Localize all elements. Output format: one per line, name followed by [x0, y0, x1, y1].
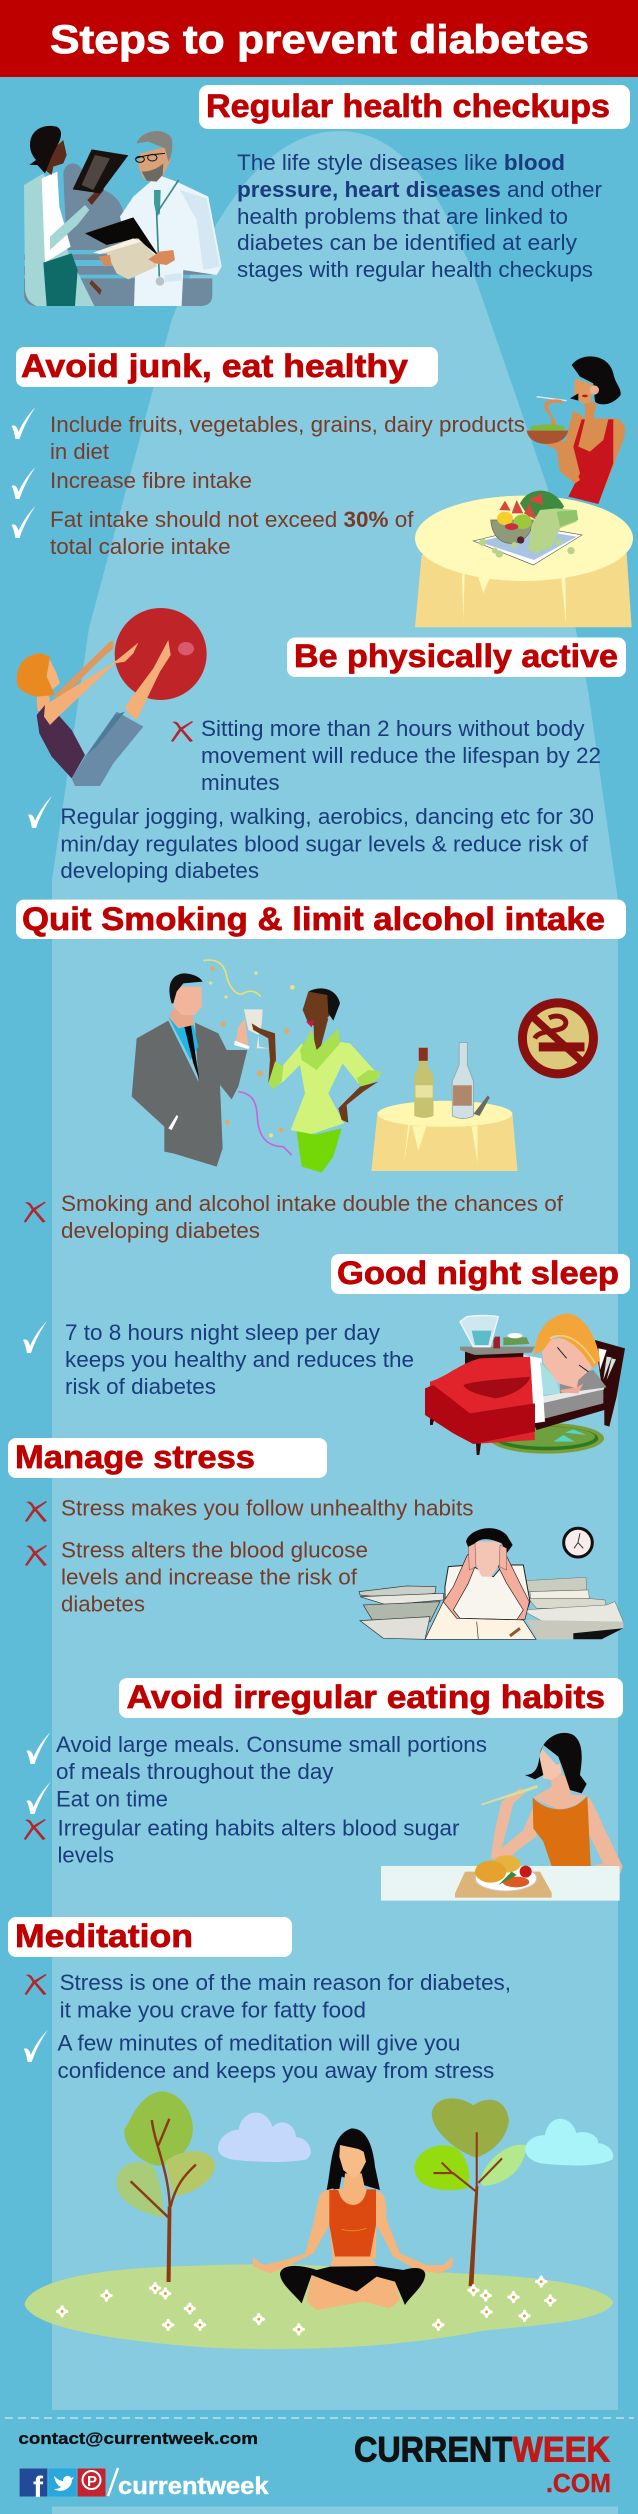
icon: facebook: f [33, 2471, 44, 2504]
illustration: woman asleep in bed [425, 1314, 625, 1455]
footer [18, 2429, 611, 2504]
tick icon [26, 1782, 50, 1814]
body text: diabetes can be identified at early [237, 230, 577, 255]
item [61, 1538, 368, 1616]
contact email: contact@currentweek.com [18, 2429, 258, 2448]
heading [8, 1438, 327, 1478]
item: it make you crave for fatty food [60, 1998, 366, 2022]
logo: WEEK [512, 2430, 610, 2470]
body text [237, 150, 602, 282]
item: Avoid large meals. Consume small portions [56, 1732, 487, 1757]
warning text: Smoking and alcohol intake double the chances of [61, 1191, 564, 1216]
warning text: movement will reduce the lifespan by 22 [201, 743, 601, 768]
flowers [56, 2276, 556, 2336]
illustration: doctors [24, 126, 222, 306]
section: avoid irregular eating [24, 1678, 623, 1901]
item: of meals throughout the day [56, 1759, 334, 1784]
item: diabetes [61, 1592, 145, 1616]
checklist [12, 407, 525, 559]
advice text: Regular jogging, walking, aerobics, dancing etc for 30 [60, 804, 594, 829]
heading: Avoid irregular eating habits [126, 1679, 605, 1715]
dashed footer divider [5, 2417, 634, 2419]
heading: Be physically active [294, 638, 618, 674]
cloud right [525, 2119, 613, 2165]
heading: Meditation [15, 1918, 193, 1954]
section: quit smoking [16, 900, 626, 1243]
heading: Good night sleep [337, 1255, 619, 1291]
advice text: min/day regulates blood sugar levels & reduce risk of [60, 831, 589, 856]
cross icon [24, 1974, 46, 1995]
item: confidence and keeps you away from stress [58, 2058, 494, 2083]
heading: Avoid junk, eat healthy [21, 348, 408, 384]
advice text: risk of diabetes [65, 1374, 216, 1399]
body text: The life style diseases like blood [237, 150, 565, 175]
section: manage stress [8, 1438, 623, 1639]
warning text: developing diabetes [61, 1218, 260, 1243]
icon: twitter [48, 2468, 77, 2496]
illustration: woman with exercise ball [17, 608, 207, 786]
heading: Regular health checkups [206, 88, 610, 124]
section: regular health checkups [24, 85, 630, 306]
warning text [201, 716, 601, 795]
heading: Manage stress [15, 1439, 255, 1475]
body text: pressure, heart diseases and other [237, 177, 602, 202]
item [58, 1816, 460, 1868]
icon: pinterest: P [87, 2473, 97, 2490]
tick icon [24, 2030, 48, 2062]
title banner [0, 0, 638, 77]
illustration: stressed worker with books [359, 1528, 623, 1639]
cross icon [25, 1501, 47, 1522]
item: Stress makes you follow unhealthy habits [61, 1496, 473, 1520]
section: avoid junk [12, 347, 633, 627]
cross icon [24, 1819, 46, 1840]
heading: Quit Smoking & limit alcohol intake [22, 901, 605, 937]
icon: no smoking sign [522, 1003, 593, 1074]
illustration: wine table [371, 1042, 518, 1171]
item: Fat intake should not exceed 30% of [50, 507, 414, 532]
item continued: in diet [50, 439, 109, 464]
advice text [60, 804, 594, 883]
icon: pinterest [78, 2468, 106, 2496]
tick icon [23, 1321, 47, 1353]
item [60, 1970, 511, 2022]
illustration: couple toasting [132, 960, 382, 1173]
advice text: developing diabetes [60, 858, 259, 883]
body text: stages with regular health checkups [237, 257, 593, 282]
cross icon [25, 1545, 47, 1566]
ground [24, 2264, 613, 2349]
section: good night sleep [23, 1254, 630, 1455]
cross icon [24, 1202, 46, 1223]
illustration: meditation scene [24, 2091, 613, 2349]
footer bottom strip [52, 2506, 618, 2514]
meditating woman [253, 2128, 453, 2310]
item continued: total calorie intake [50, 534, 231, 559]
tick icon [26, 1732, 50, 1764]
body text: health problems that are linked to [237, 204, 568, 229]
advice text: keeps you healthy and reduces the [65, 1347, 414, 1372]
illustration: woman eating a meal [381, 1733, 623, 1901]
heading [8, 1917, 292, 1957]
advice text: 7 to 8 hours night sleep per day [65, 1320, 380, 1345]
warning text: Sitting more than 2 hours without body [201, 716, 584, 741]
item: levels and increase the risk of [61, 1564, 358, 1590]
social handle: currentweek [118, 2473, 269, 2500]
tree right [414, 2098, 527, 2286]
item [56, 1732, 487, 1784]
section: meditation [8, 1917, 613, 2349]
item: Stress alters the blood glucose [61, 1538, 368, 1562]
logo: CURRENT [354, 2430, 512, 2470]
item: A few minutes of meditation will give you [58, 2031, 460, 2056]
item: Eat on time [56, 1786, 168, 1812]
warning text [61, 1191, 564, 1243]
item [58, 2031, 494, 2083]
item: Increase fibre intake [50, 468, 252, 493]
item: Stress is one of the main reason for diabetes, [60, 1970, 511, 1995]
warning text: minutes [201, 770, 280, 795]
tick icon [12, 506, 36, 538]
item: levels [58, 1842, 114, 1868]
logo: .COM [546, 2468, 611, 2498]
tree left [116, 2091, 216, 2282]
item: Include fruits, vegetables, grains, dairy products [50, 412, 525, 437]
cross icon [171, 721, 193, 742]
cloud left [218, 2113, 311, 2162]
section: be physically active [17, 608, 626, 883]
tick icon [12, 407, 36, 439]
advice text [65, 1320, 414, 1399]
tick icon [28, 796, 52, 828]
logo [354, 2430, 611, 2498]
illustration: woman eating at table [415, 356, 633, 627]
icon: facebook [20, 2468, 47, 2504]
tick icon [12, 467, 36, 499]
item: Irregular eating habits alters blood sugar [58, 1816, 460, 1840]
title banner: Steps to prevent diabetes [50, 18, 589, 62]
